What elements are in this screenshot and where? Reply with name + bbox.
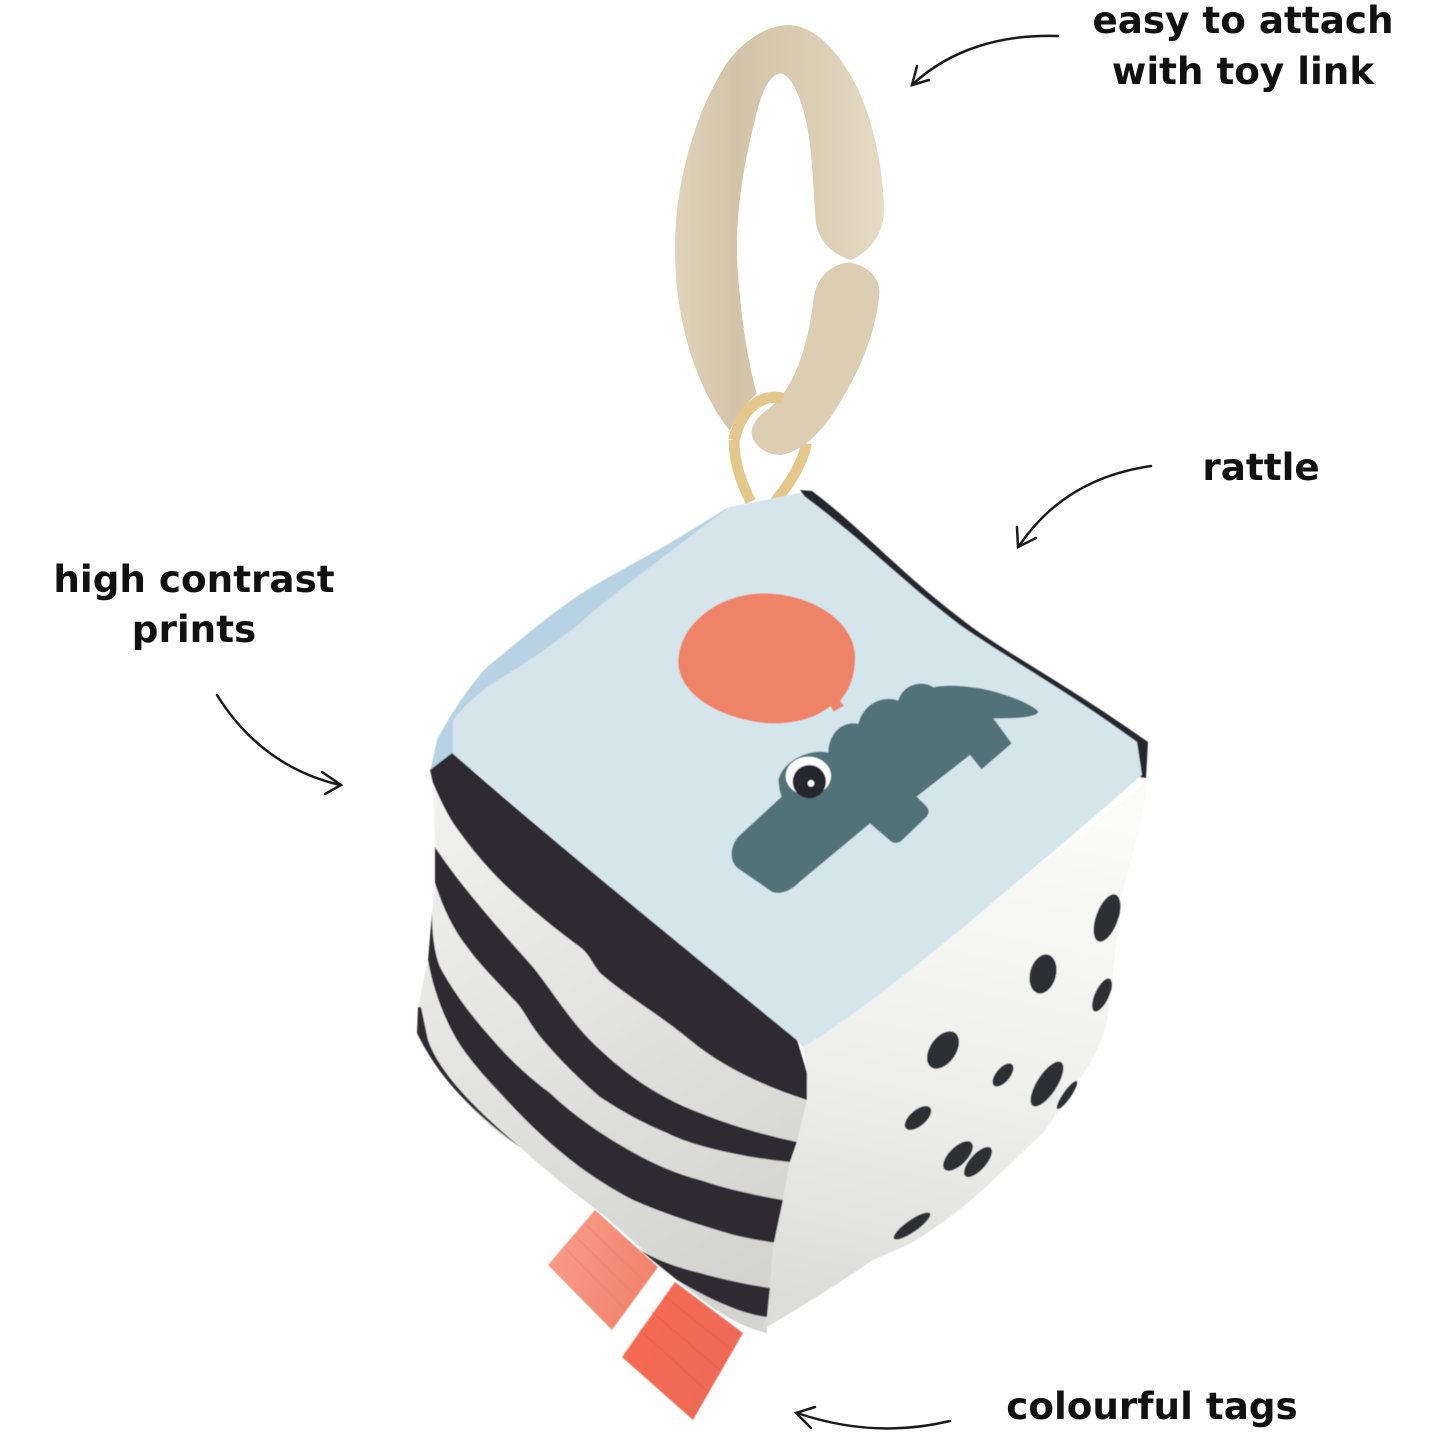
- elastic strands: [734, 440, 807, 502]
- left face: stripes: [417, 753, 807, 1333]
- label: colourful tags: colourful tags: [1006, 1384, 1298, 1428]
- label: rattle: rattle: [1202, 445, 1320, 489]
- label: easy to attach with toy link: with toy link: [1112, 49, 1375, 93]
- stripe 4: [417, 1007, 520, 1147]
- arrow: colourful tags: [796, 1407, 950, 1429]
- balloon and crocodile print: [678, 593, 1038, 893]
- toy link ring: [675, 25, 884, 502]
- label: easy to attach with toy link: [1092, 0, 1394, 93]
- stripe 1: [430, 753, 807, 1100]
- arrow: toy link: [912, 36, 1058, 85]
- top face: [453, 493, 1142, 1047]
- arrow: rattle: [1017, 466, 1151, 547]
- arrow: high contrast prints: [217, 695, 341, 794]
- label: high contrast prints: [53, 557, 335, 651]
- stripe 5: [640, 1250, 770, 1317]
- stripe 3: [428, 913, 783, 1243]
- side flap: [430, 508, 760, 772]
- upper ring section: [675, 25, 884, 431]
- dark back edge: [800, 490, 1148, 778]
- crocodile: [732, 684, 1038, 893]
- label: high contrast prints: prints: [132, 607, 256, 651]
- lower ring section: [752, 262, 879, 455]
- crocodile eye: [786, 757, 831, 795]
- label: high contrast prints: high contrast: [53, 557, 335, 601]
- stripe 2: [435, 847, 797, 1162]
- right face: dots: [762, 781, 1147, 1330]
- plush cube: [417, 490, 1148, 1420]
- front tag: [622, 1282, 743, 1420]
- elastic arc: [734, 397, 783, 440]
- back tag: [548, 1210, 658, 1330]
